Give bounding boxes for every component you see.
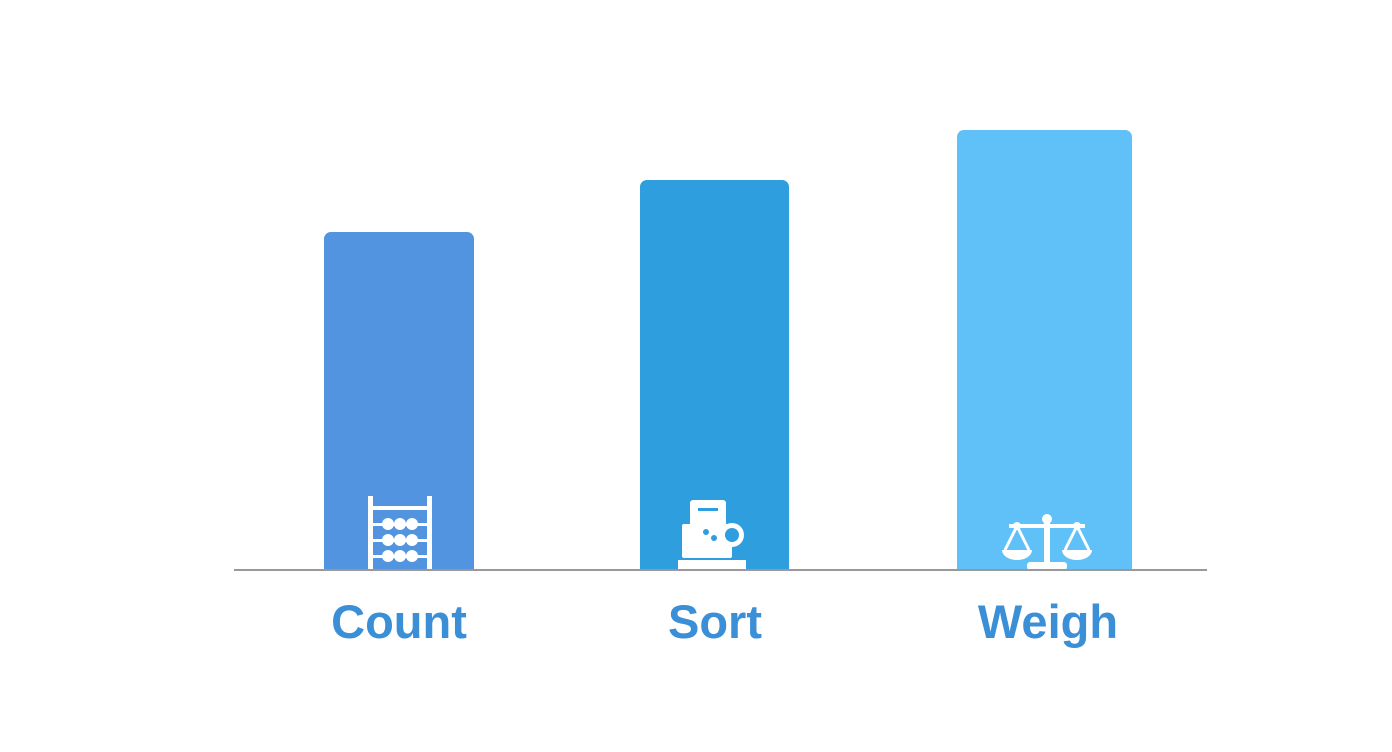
- icon: sorting machine: [678, 500, 746, 569]
- label: Sort: Sort: [668, 595, 762, 648]
- icon: abacus: [368, 496, 432, 569]
- bar: Sort: [640, 180, 789, 570]
- label: Weigh: Weigh: [978, 595, 1118, 648]
- bar: Weigh: [957, 130, 1132, 570]
- label: Count: Count: [331, 595, 467, 648]
- icon: scales: [1002, 514, 1092, 569]
- baseline axis: [234, 569, 1207, 571]
- bar: Count: [324, 232, 474, 570]
